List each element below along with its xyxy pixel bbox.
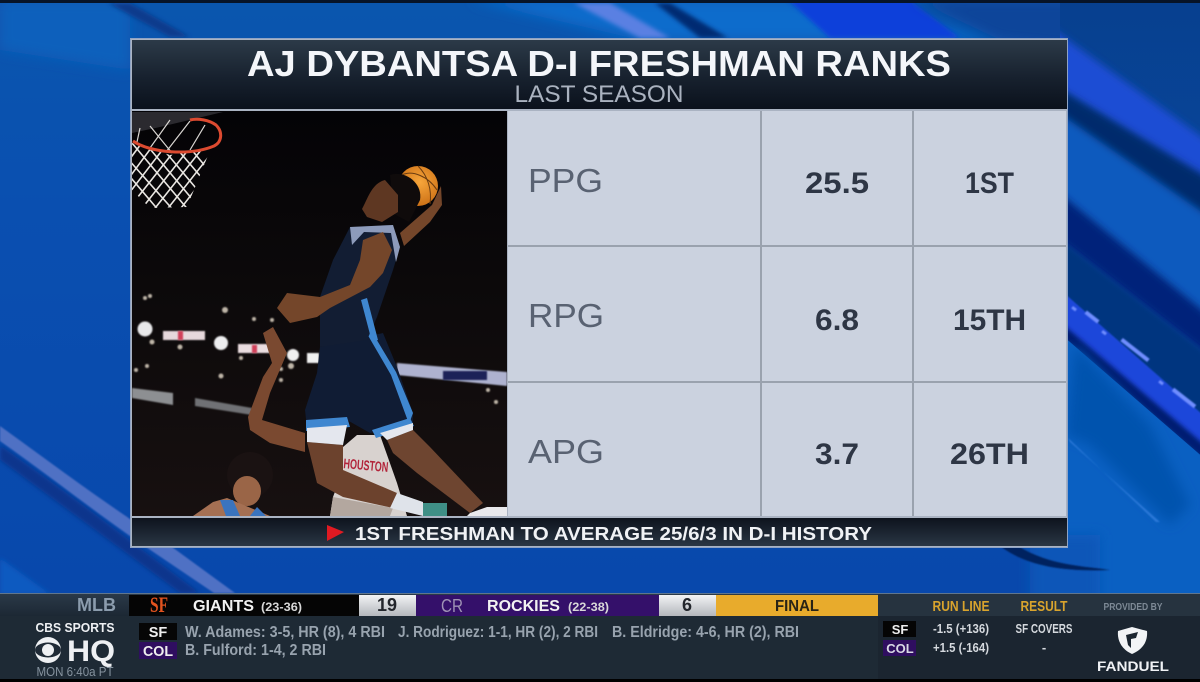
- CBS Sports HQ logo: [35, 620, 115, 679]
- performer stats: J. Rodriguez: 1-1, HR (2), 2 RBI: [398, 624, 598, 641]
- team tag: SF: SF: [149, 625, 167, 641]
- row: PPG: PPG: [528, 162, 603, 199]
- row: RPG: RPG: [528, 297, 604, 334]
- backboard edge: [132, 112, 223, 133]
- footnote text: 1ST FRESHMAN TO AVERAGE 25/6/3 IN D-I HISTORY: [355, 523, 873, 544]
- team: Giants: GIANTS: [193, 598, 254, 615]
- score: Giants: 19: [377, 595, 397, 615]
- betting panel: COL: [886, 641, 914, 656]
- team: Rockies: [416, 595, 659, 616]
- panel: freshman ranks graphic: [120, 38, 1068, 548]
- row: APG: [528, 433, 1029, 471]
- icon: red play arrow: [327, 525, 344, 541]
- team: Giants: [129, 592, 359, 617]
- row: APG: 3.7: [815, 438, 859, 471]
- left swoosh: [0, 445, 200, 593]
- sponsor: FanDuel: [1097, 602, 1169, 674]
- icon: FanDuel shield: [1118, 627, 1147, 654]
- sponsor: FanDuel: PROVIDED BY: [1104, 602, 1163, 613]
- row: RPG: [528, 297, 1026, 337]
- hoop net: [132, 120, 208, 208]
- performer stats: B. Eldridge: 4-6, HR (2), RBI: [612, 624, 799, 641]
- team: Giants: (23-36): [261, 600, 302, 614]
- table grid: [508, 111, 1066, 516]
- row: RPG: 6.8: [815, 304, 859, 337]
- basketball: [398, 166, 438, 206]
- photo: player dunking: [120, 111, 507, 516]
- row: PPG: [528, 162, 1014, 200]
- score: Giants: [359, 595, 416, 616]
- betting panel: [878, 594, 1200, 679]
- team tag: SF: [139, 623, 177, 641]
- player arm and hand: [277, 232, 392, 323]
- background player: [193, 476, 270, 516]
- betting panel: SF COVERS: [1016, 621, 1073, 636]
- icon: Rockies logo: CR: [441, 596, 463, 616]
- CBS Sports HQ logo: HQ: [67, 635, 115, 668]
- betting panel: RUN LINE: [932, 598, 990, 615]
- title bar: [132, 40, 1067, 109]
- league label: MLB: [77, 595, 116, 615]
- ticker: scores bar: [0, 592, 1200, 682]
- arena lights: [132, 294, 507, 415]
- betting panel: +1.5 (-164): [933, 640, 989, 655]
- dark swoosh: [1000, 546, 1110, 570]
- CBS Sports HQ logo: MON 6:40a PT: [36, 664, 114, 679]
- row: RPG: 15TH: [953, 304, 1026, 337]
- row: APG: 26TH: [950, 438, 1029, 471]
- performer stats: B. Fulford: 1-4, 2 RBI: [185, 642, 326, 659]
- betting panel: SF: [892, 622, 908, 637]
- defender jersey: [330, 435, 407, 516]
- final status: [716, 595, 878, 616]
- footnote bar: [132, 518, 1067, 546]
- betting panel: -1.5 (+136): [933, 621, 989, 636]
- score: Rockies: [659, 595, 716, 616]
- player jersey: [320, 225, 400, 347]
- performer stats: W. Adames: 3-5, HR (8), 4 RBI: [185, 624, 385, 641]
- score: Rockies: 6: [682, 595, 692, 615]
- betting panel: -: [1042, 640, 1046, 655]
- player head: [362, 174, 420, 222]
- final status: FINAL: [775, 598, 819, 615]
- icon: Giants logo: SF: [150, 592, 168, 617]
- row: PPG: 1ST: [965, 167, 1014, 200]
- row: PPG: 25.5: [805, 167, 869, 200]
- player shorts: [305, 332, 414, 445]
- team: Rockies: ROCKIES: [487, 598, 560, 615]
- row: APG: APG: [528, 433, 604, 470]
- right side streaks: [1060, 3, 1200, 593]
- team: Rockies: (22-38): [568, 600, 609, 614]
- panel frame: [130, 38, 1068, 548]
- subheading: LAST SEASON: [514, 81, 684, 108]
- defender arm: [248, 327, 305, 452]
- performer stats: [185, 624, 799, 659]
- team tag: COL: COL: [143, 644, 173, 660]
- defender jersey: HOUSTON: [343, 455, 389, 475]
- heading: AJ DYBANTSA D-I FRESHMAN RANKS: [247, 43, 951, 84]
- betting panel: RESULT: [1020, 598, 1068, 615]
- sponsor: FanDuel: FANDUEL: [1097, 658, 1169, 674]
- CBS Sports HQ logo: CBS SPORTS: [36, 620, 115, 635]
- player legs: [307, 430, 507, 516]
- stats table: [508, 111, 1066, 516]
- hoop rim: [133, 119, 221, 152]
